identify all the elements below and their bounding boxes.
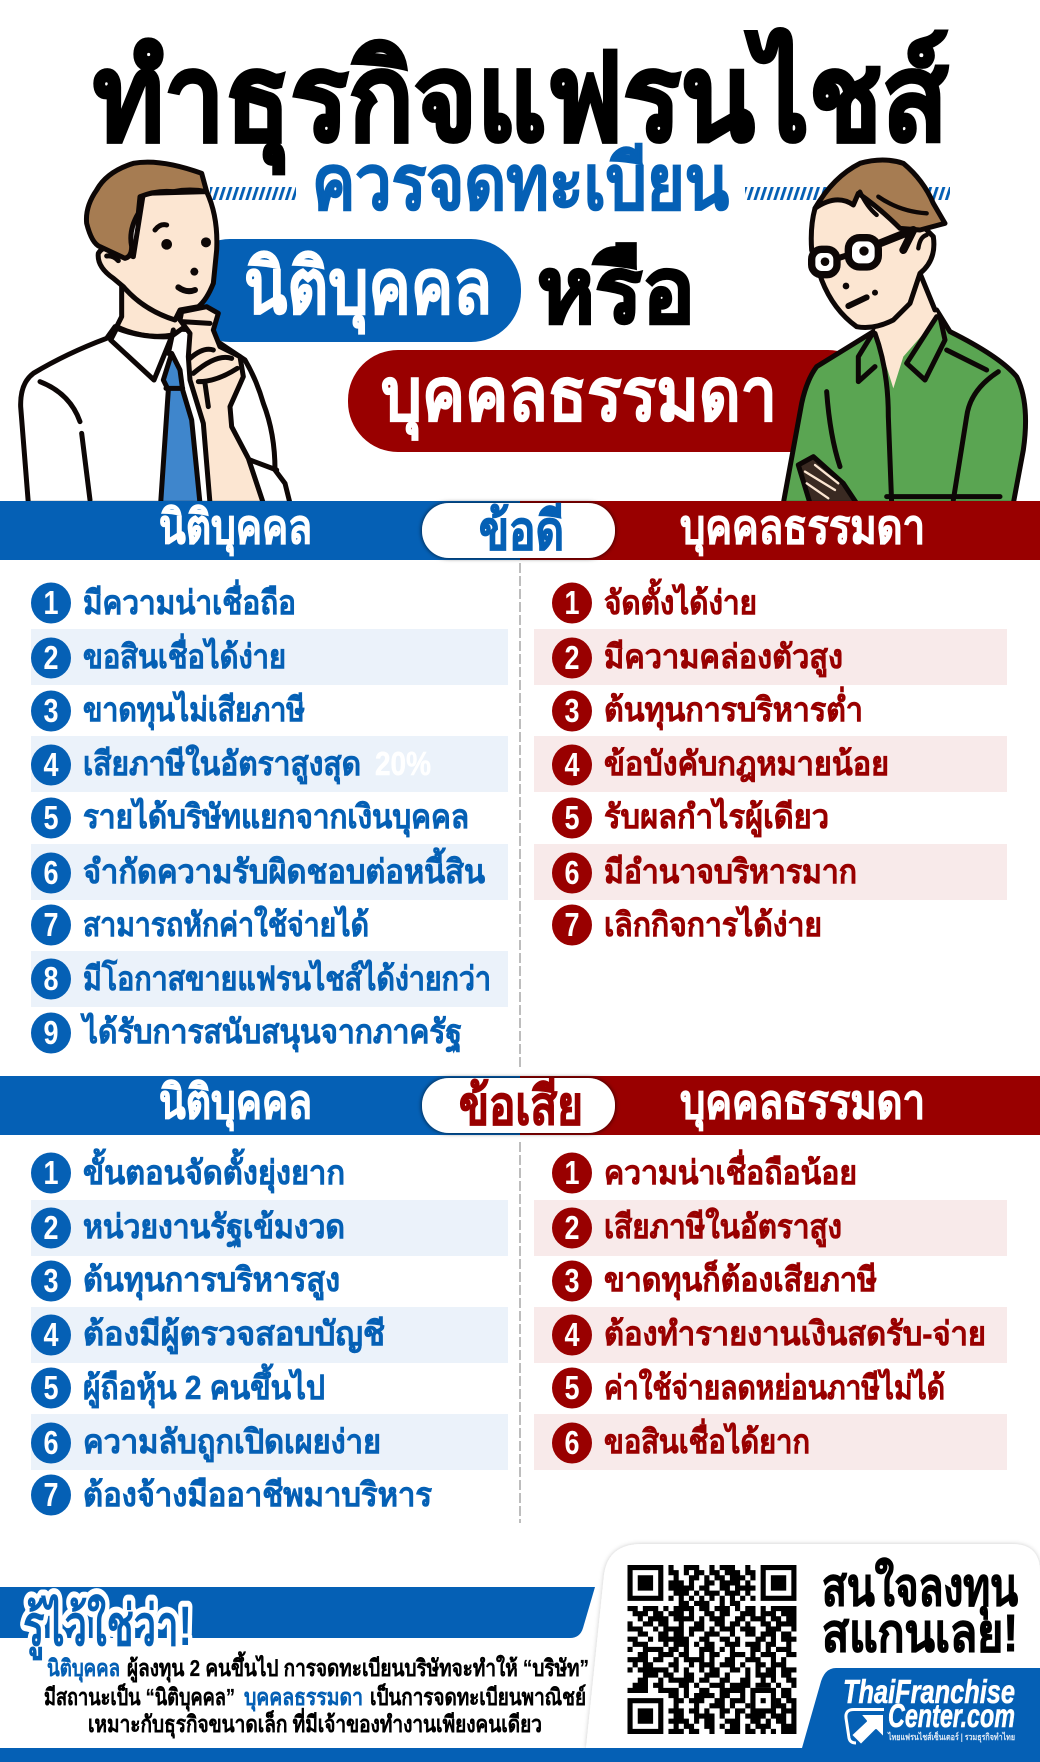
item 9: ได้รับการสนับสนุนจากภาครัฐ <box>80 1012 462 1053</box>
did-you-know text: เป็นการจดทะเบียนพาณิชย์ <box>370 1682 586 1710</box>
item 1: มีความน่าเชื่อถือ <box>83 579 296 621</box>
section header: advantages: บุคคลธรรมดา <box>680 500 925 556</box>
item 2: 2 <box>44 1209 58 1246</box>
item 1 <box>31 1148 345 1194</box>
item 6: 6 <box>564 1424 580 1461</box>
item 2: มีความคล่องตัวสูง <box>604 638 843 678</box>
item 7: 7 <box>564 906 580 943</box>
item 4: ข้อบังคับกฎหมายน้อย <box>604 745 889 782</box>
item 2 <box>552 1207 842 1248</box>
did-you-know text: นิติบุคคล <box>47 1655 120 1683</box>
item 7: 7 <box>44 1476 58 1513</box>
did-you-know text: มีสถานะเป็น “นิติบุคคล” <box>44 1682 235 1712</box>
item 4: ต้องมีผู้ตรวจสอบบัญชี <box>83 1315 385 1355</box>
hatch decoration: left <box>210 187 296 200</box>
item 3: 3 <box>564 1262 580 1299</box>
footer band <box>0 1587 595 1638</box>
pill: juristic person <box>180 239 521 342</box>
pill: natural person <box>348 350 878 452</box>
QR and call-to-action card <box>0 1544 1040 1762</box>
QR code <box>628 1565 796 1734</box>
item 1 <box>31 579 296 624</box>
center divider <box>519 563 521 1523</box>
illustration: man with glasses in green shirt <box>783 160 1026 503</box>
item 1: 1 <box>44 584 58 621</box>
icon: arrow <box>846 1710 884 1745</box>
item 7: เลิกกิจการได้ง่าย <box>604 905 822 943</box>
item 5 <box>31 1363 325 1409</box>
section header: advantages: ข้อดี <box>479 502 564 561</box>
item 4: เสียภาษีในอัตราสูงสุด <box>83 744 361 785</box>
item 3: ต้นทุนการบริหารสูง <box>83 1261 340 1301</box>
item 5: รับผลกำไรผู้เดียว <box>604 797 829 838</box>
title: ทำธุรกิจแฟรนไชส์ <box>93 29 948 174</box>
panel: advantages, juristic person <box>31 579 508 1054</box>
item 4: 20% <box>375 745 431 782</box>
item 4: 4 <box>564 1316 580 1353</box>
panel: advantages, natural person <box>534 578 1007 946</box>
item 5 <box>552 797 829 838</box>
section header: advantages <box>0 500 1040 561</box>
bottom bar <box>0 1748 1040 1762</box>
illustration: businessman in white shirt <box>21 162 290 503</box>
logo: ThaiFranchise Center <box>802 1668 1040 1748</box>
section header: advantages: นิติบุคคล <box>159 500 312 556</box>
item 4: 4 <box>44 1316 59 1353</box>
item 2: 2 <box>44 639 58 676</box>
item 5: ค่าใช้จ่ายลดหย่อนภาษีไม่ได้ <box>604 1368 945 1406</box>
item 5: 5 <box>564 799 580 836</box>
section header: disadvantages: ข้อเสีย <box>459 1077 583 1136</box>
item 5: 5 <box>44 799 58 836</box>
item 7 <box>552 904 822 946</box>
item 3: ต้นทุนการบริหารต่ำ <box>604 686 863 731</box>
item 6: 6 <box>564 854 580 891</box>
subtitle: ควรจดทะเบียน <box>312 141 729 226</box>
word: or: หรือ <box>537 240 695 342</box>
item 6: จำกัดความรับผิดชอบต่อหนี้สิน <box>83 847 485 890</box>
item 6 <box>552 1418 810 1464</box>
item 3: 3 <box>44 1262 58 1299</box>
item 1: 1 <box>564 1154 580 1191</box>
item 6: ขอสินเชื่อได้ยาก <box>604 1418 810 1460</box>
item 2: 2 <box>564 1209 580 1246</box>
pill: juristic person: นิติบุคคล <box>244 245 492 335</box>
item 1: 1 <box>564 584 580 621</box>
item 5: 5 <box>564 1369 580 1406</box>
item 5: ผู้ถือหุ้น 2 คนขึ้นไป <box>83 1363 325 1409</box>
item 2: ขอสินเชื่อได้ง่าย <box>83 633 286 675</box>
did-you-know text: เหมาะกับธุรกิจขนาดเล็ก ที่มีเจ้าของทำงานเพียงคนเดียว <box>88 1707 542 1739</box>
item 9: 9 <box>44 1014 58 1051</box>
item 4: 4 <box>564 746 580 783</box>
item 3: 3 <box>564 692 580 729</box>
did-you-know text <box>44 1651 589 1739</box>
item 2: หน่วยงานรัฐเข้มงวด <box>83 1208 345 1248</box>
item 8: มีโอกาสขายแฟรนไชส์ได้ง่ายกว่า <box>83 959 491 997</box>
item 5: รายได้บริษัทแยกจากเงินบุคคล <box>83 797 469 838</box>
item 7: ต้องจ้างมืออาชีพมาบริหาร <box>83 1476 432 1513</box>
item 3: ขาดทุนไม่เสียภาษี <box>83 690 305 731</box>
item 4: ต้องทำรายงานเงินสดรับ-จ่าย <box>604 1315 986 1352</box>
item 6: 6 <box>44 1424 58 1461</box>
item 1: จัดตั้งได้ง่าย <box>604 578 757 621</box>
item 2: เสียภาษีในอัตราสูง <box>604 1207 842 1248</box>
item 1: 1 <box>44 1154 58 1191</box>
item 3 <box>31 690 305 732</box>
item 7: 7 <box>44 906 58 943</box>
panel: disadvantages, natural person <box>534 1149 1007 1470</box>
item 6: ความลับถูกเปิดเผยง่าย <box>83 1423 381 1463</box>
item 8: 8 <box>44 960 58 997</box>
did-you-know text: บุคคลธรรมดา <box>244 1684 363 1712</box>
hatch decoration: right <box>745 187 950 200</box>
item 6 <box>552 852 857 894</box>
item 4: 4 <box>44 746 59 783</box>
section header: disadvantages <box>0 1075 1040 1136</box>
item 6 <box>31 847 485 894</box>
panel: disadvantages, juristic person <box>31 1148 508 1516</box>
item 4 <box>31 744 431 786</box>
item 1 <box>552 578 757 624</box>
pill: natural person: บุคคลธรรมดา <box>381 353 777 441</box>
item 1 <box>552 1149 857 1194</box>
item 5 <box>552 1368 945 1408</box>
item 3 <box>552 1259 877 1302</box>
item 5: 5 <box>44 1369 58 1406</box>
item 1: ขั้นตอนจัดตั้งยุ่งยาก <box>83 1148 345 1194</box>
item 7: สามารถหักค่าใช้จ่ายได้ <box>83 905 369 943</box>
item 3: 3 <box>44 692 58 729</box>
section header: disadvantages: นิติบุคคล <box>159 1075 312 1131</box>
item 3: ขาดทุนก็ต้องเสียภาษี <box>604 1259 877 1301</box>
section header: disadvantages: บุคคลธรรมดา <box>680 1075 925 1131</box>
item 6: 6 <box>44 854 58 891</box>
did-you-know heading: รู้ไว้ใช่ว่า! <box>23 1593 192 1661</box>
item 2: 2 <box>564 639 580 676</box>
item 2 <box>31 633 286 678</box>
item 6: มีอำนาจบริหารมาก <box>604 853 857 890</box>
did-you-know text: ผู้ลงทุน 2 คนขึ้นไป การจดทะเบียนบริษัทจะทำให้ “บริษัท” <box>127 1651 589 1683</box>
item 3 <box>552 686 863 732</box>
item 7 <box>31 904 369 946</box>
item 1: ความน่าเชื่อถือน้อย <box>604 1149 857 1191</box>
